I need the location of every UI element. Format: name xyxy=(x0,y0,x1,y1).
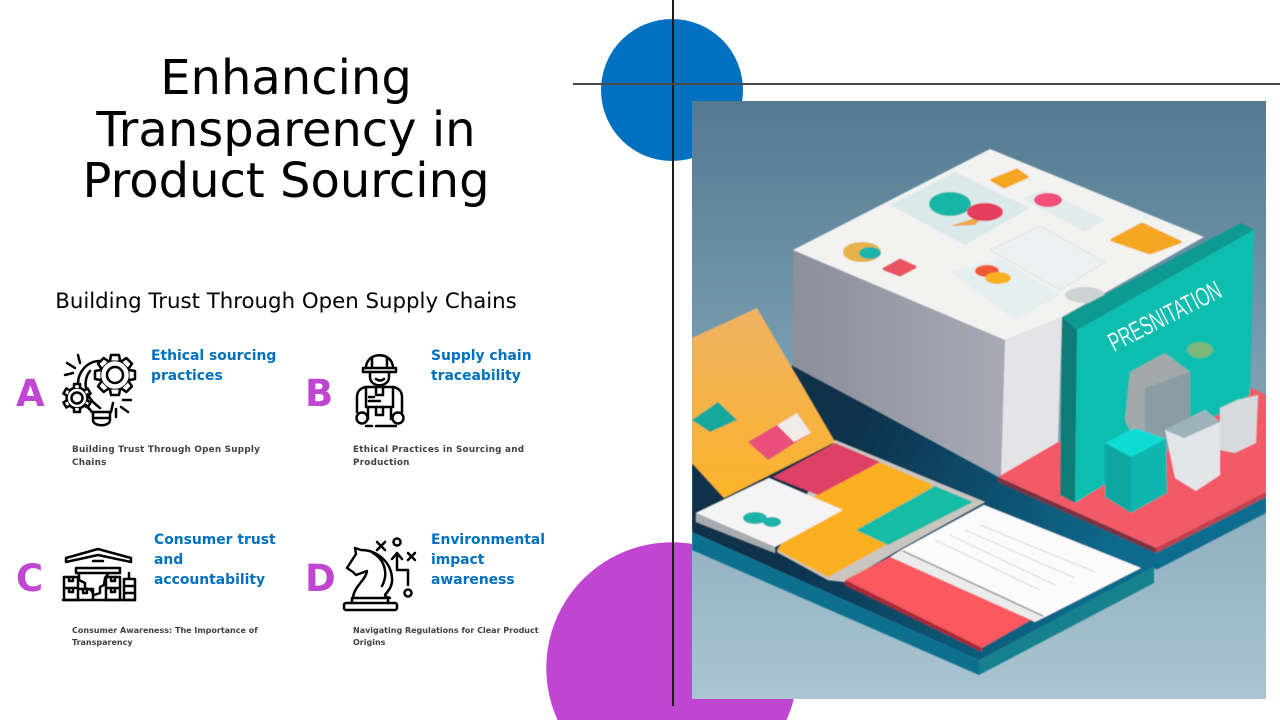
title: Enhancing xyxy=(160,50,412,106)
heading xyxy=(151,348,276,384)
blue base xyxy=(692,365,1156,660)
heading: Consumer trust xyxy=(154,532,276,548)
icon: worker carrying box xyxy=(355,354,405,428)
description: Ethical Practices in Sourcing and xyxy=(353,445,524,455)
icon: warehouse xyxy=(62,548,136,602)
heading: impact xyxy=(431,552,484,568)
illustration: isometric presentation scene: PRESNITATION xyxy=(1103,275,1226,357)
icon: lightbulb with gears xyxy=(62,354,136,426)
description xyxy=(72,626,258,647)
heading: awareness xyxy=(431,572,515,588)
description: Transparency xyxy=(72,638,133,647)
description: Origins xyxy=(353,638,385,647)
description: Navigating Regulations for Clear Product xyxy=(353,626,539,635)
crosshair line: vertical xyxy=(672,0,674,706)
small boxes xyxy=(1220,395,1258,453)
decorative circle: purple xyxy=(546,542,798,720)
heading: Ethical sourcing xyxy=(151,348,276,364)
heading: accountability xyxy=(154,572,265,588)
item A: ethical sourcing xyxy=(16,348,276,468)
description xyxy=(353,626,539,647)
heading xyxy=(431,348,532,384)
letter D: D xyxy=(305,557,336,600)
description: Production xyxy=(353,458,410,468)
subtitle: Building Trust Through Open Supply Chains xyxy=(55,289,517,314)
cards and documents xyxy=(777,440,985,582)
heading: practices xyxy=(151,368,223,384)
description: Chains xyxy=(72,458,107,468)
red floor xyxy=(998,388,1266,548)
item D: environmental impact xyxy=(305,532,545,647)
yellow folder xyxy=(692,308,835,498)
decorative circle: blue xyxy=(601,19,743,161)
heading: Supply chain xyxy=(431,348,532,364)
teal panel xyxy=(1060,317,1077,503)
description xyxy=(72,445,260,468)
item B: supply chain traceability xyxy=(305,348,532,468)
letter B: B xyxy=(305,372,333,415)
big box xyxy=(793,250,1005,477)
heading xyxy=(431,532,545,588)
heading: traceability xyxy=(431,368,521,384)
title: Transparency in xyxy=(96,102,476,158)
icon: chess knight with strategy arrows xyxy=(342,537,416,612)
item C: consumer trust xyxy=(16,532,276,647)
letter A: A xyxy=(16,372,45,415)
heading: and xyxy=(154,552,183,568)
crosshair line: horizontal xyxy=(573,83,1280,85)
title: Product Sourcing xyxy=(82,153,490,209)
title xyxy=(82,50,490,209)
description: Building Trust Through Open Supply xyxy=(72,445,260,455)
description xyxy=(353,445,524,468)
heading xyxy=(154,532,276,588)
description: Consumer Awareness: The Importance of xyxy=(72,626,258,635)
heading: Environmental xyxy=(431,532,545,548)
illustration: isometric presentation scene xyxy=(692,101,1266,699)
letter C: C xyxy=(16,557,43,600)
